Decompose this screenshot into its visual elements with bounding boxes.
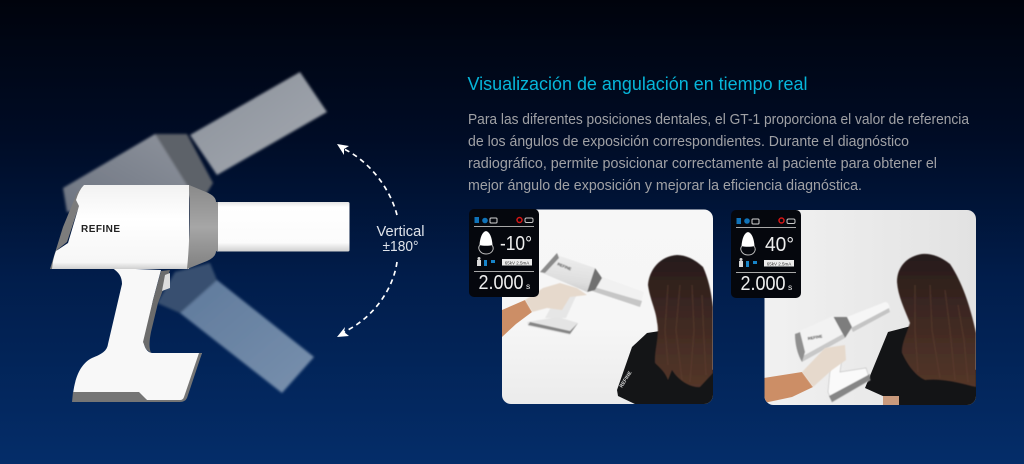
woman's hair: [648, 255, 713, 387]
device in hand: REFINE: [557, 261, 572, 272]
patient icons: [477, 257, 495, 266]
description text: [468, 112, 969, 194]
shirt logo: REFINE: [619, 370, 634, 389]
device brand: REFINE: [81, 224, 120, 235]
device in hand: [795, 302, 890, 402]
device grip edge: [143, 270, 170, 353]
woman's shirt: [617, 331, 713, 405]
rotation label: ±180°: [382, 239, 418, 255]
divider: [736, 227, 796, 228]
gloved hand: [525, 283, 587, 312]
exposure time: 2.000: [740, 273, 786, 295]
description text: de los ángulos de exposición correspondientes. Durante el diagnóstico: [468, 134, 909, 150]
device trigger: [162, 273, 170, 291]
description text: Para las diferentes posiciones dentales, el GT-1 proporciona el valor de referencia: [468, 112, 969, 128]
divider: [474, 226, 534, 227]
divider: [736, 272, 796, 273]
status icons: [736, 218, 795, 224]
status icons: [474, 217, 533, 223]
rotation label: Vertical: [376, 224, 424, 240]
title: Visualización de angulación en tiempo real: [468, 74, 808, 94]
exposure setting: 65kV 2.5mA: [505, 260, 529, 265]
device handle and foot: [73, 268, 202, 401]
tooth icon: [741, 232, 755, 255]
description text: mejor ángulo de exposición y mejorar la eficiencia diagnóstica.: [468, 178, 862, 194]
device rear grey strip: [50, 185, 84, 269]
arm: [502, 300, 532, 337]
woman's shirt: [865, 325, 976, 405]
gloved hand: [802, 345, 846, 387]
woman's hair: [897, 254, 976, 387]
arrow: lower dashed arc: [337, 262, 397, 337]
divider: [474, 271, 534, 272]
device body: [52, 185, 189, 269]
exposure time: s: [788, 282, 792, 292]
ghost device: upper rotated position: [63, 72, 327, 212]
photo 2: device at 40 degrees: [764, 210, 977, 406]
device foot base: [72, 353, 202, 402]
exposure time: s: [526, 281, 530, 291]
exposure setting: 65kV 2.5mA: [767, 261, 791, 266]
angle value: 40°: [765, 234, 794, 256]
rotation label: [376, 224, 424, 255]
tooth icon: [479, 231, 493, 254]
patient icons: [739, 258, 757, 267]
angle screen 2: [731, 210, 801, 298]
arrow: upper dashed arc: [337, 144, 397, 215]
device grey collar: [187, 185, 218, 269]
device in hand: [527, 253, 644, 335]
angle value: -10°: [500, 233, 532, 255]
main device: [50, 185, 350, 402]
exposure time: 2.000: [478, 272, 524, 294]
device tube: [216, 202, 350, 252]
angle screen 1: [469, 209, 539, 297]
woman's neck/arm: [883, 396, 899, 405]
photo 1: device at -10 degrees: [502, 209, 714, 405]
arm: [764, 372, 813, 403]
description text: radiográfico, permite posicionar correctamente al paciente para obtener el: [468, 156, 937, 172]
ghost device: lower rotated position: [157, 263, 314, 393]
device in hand: REFINE: [807, 333, 823, 341]
